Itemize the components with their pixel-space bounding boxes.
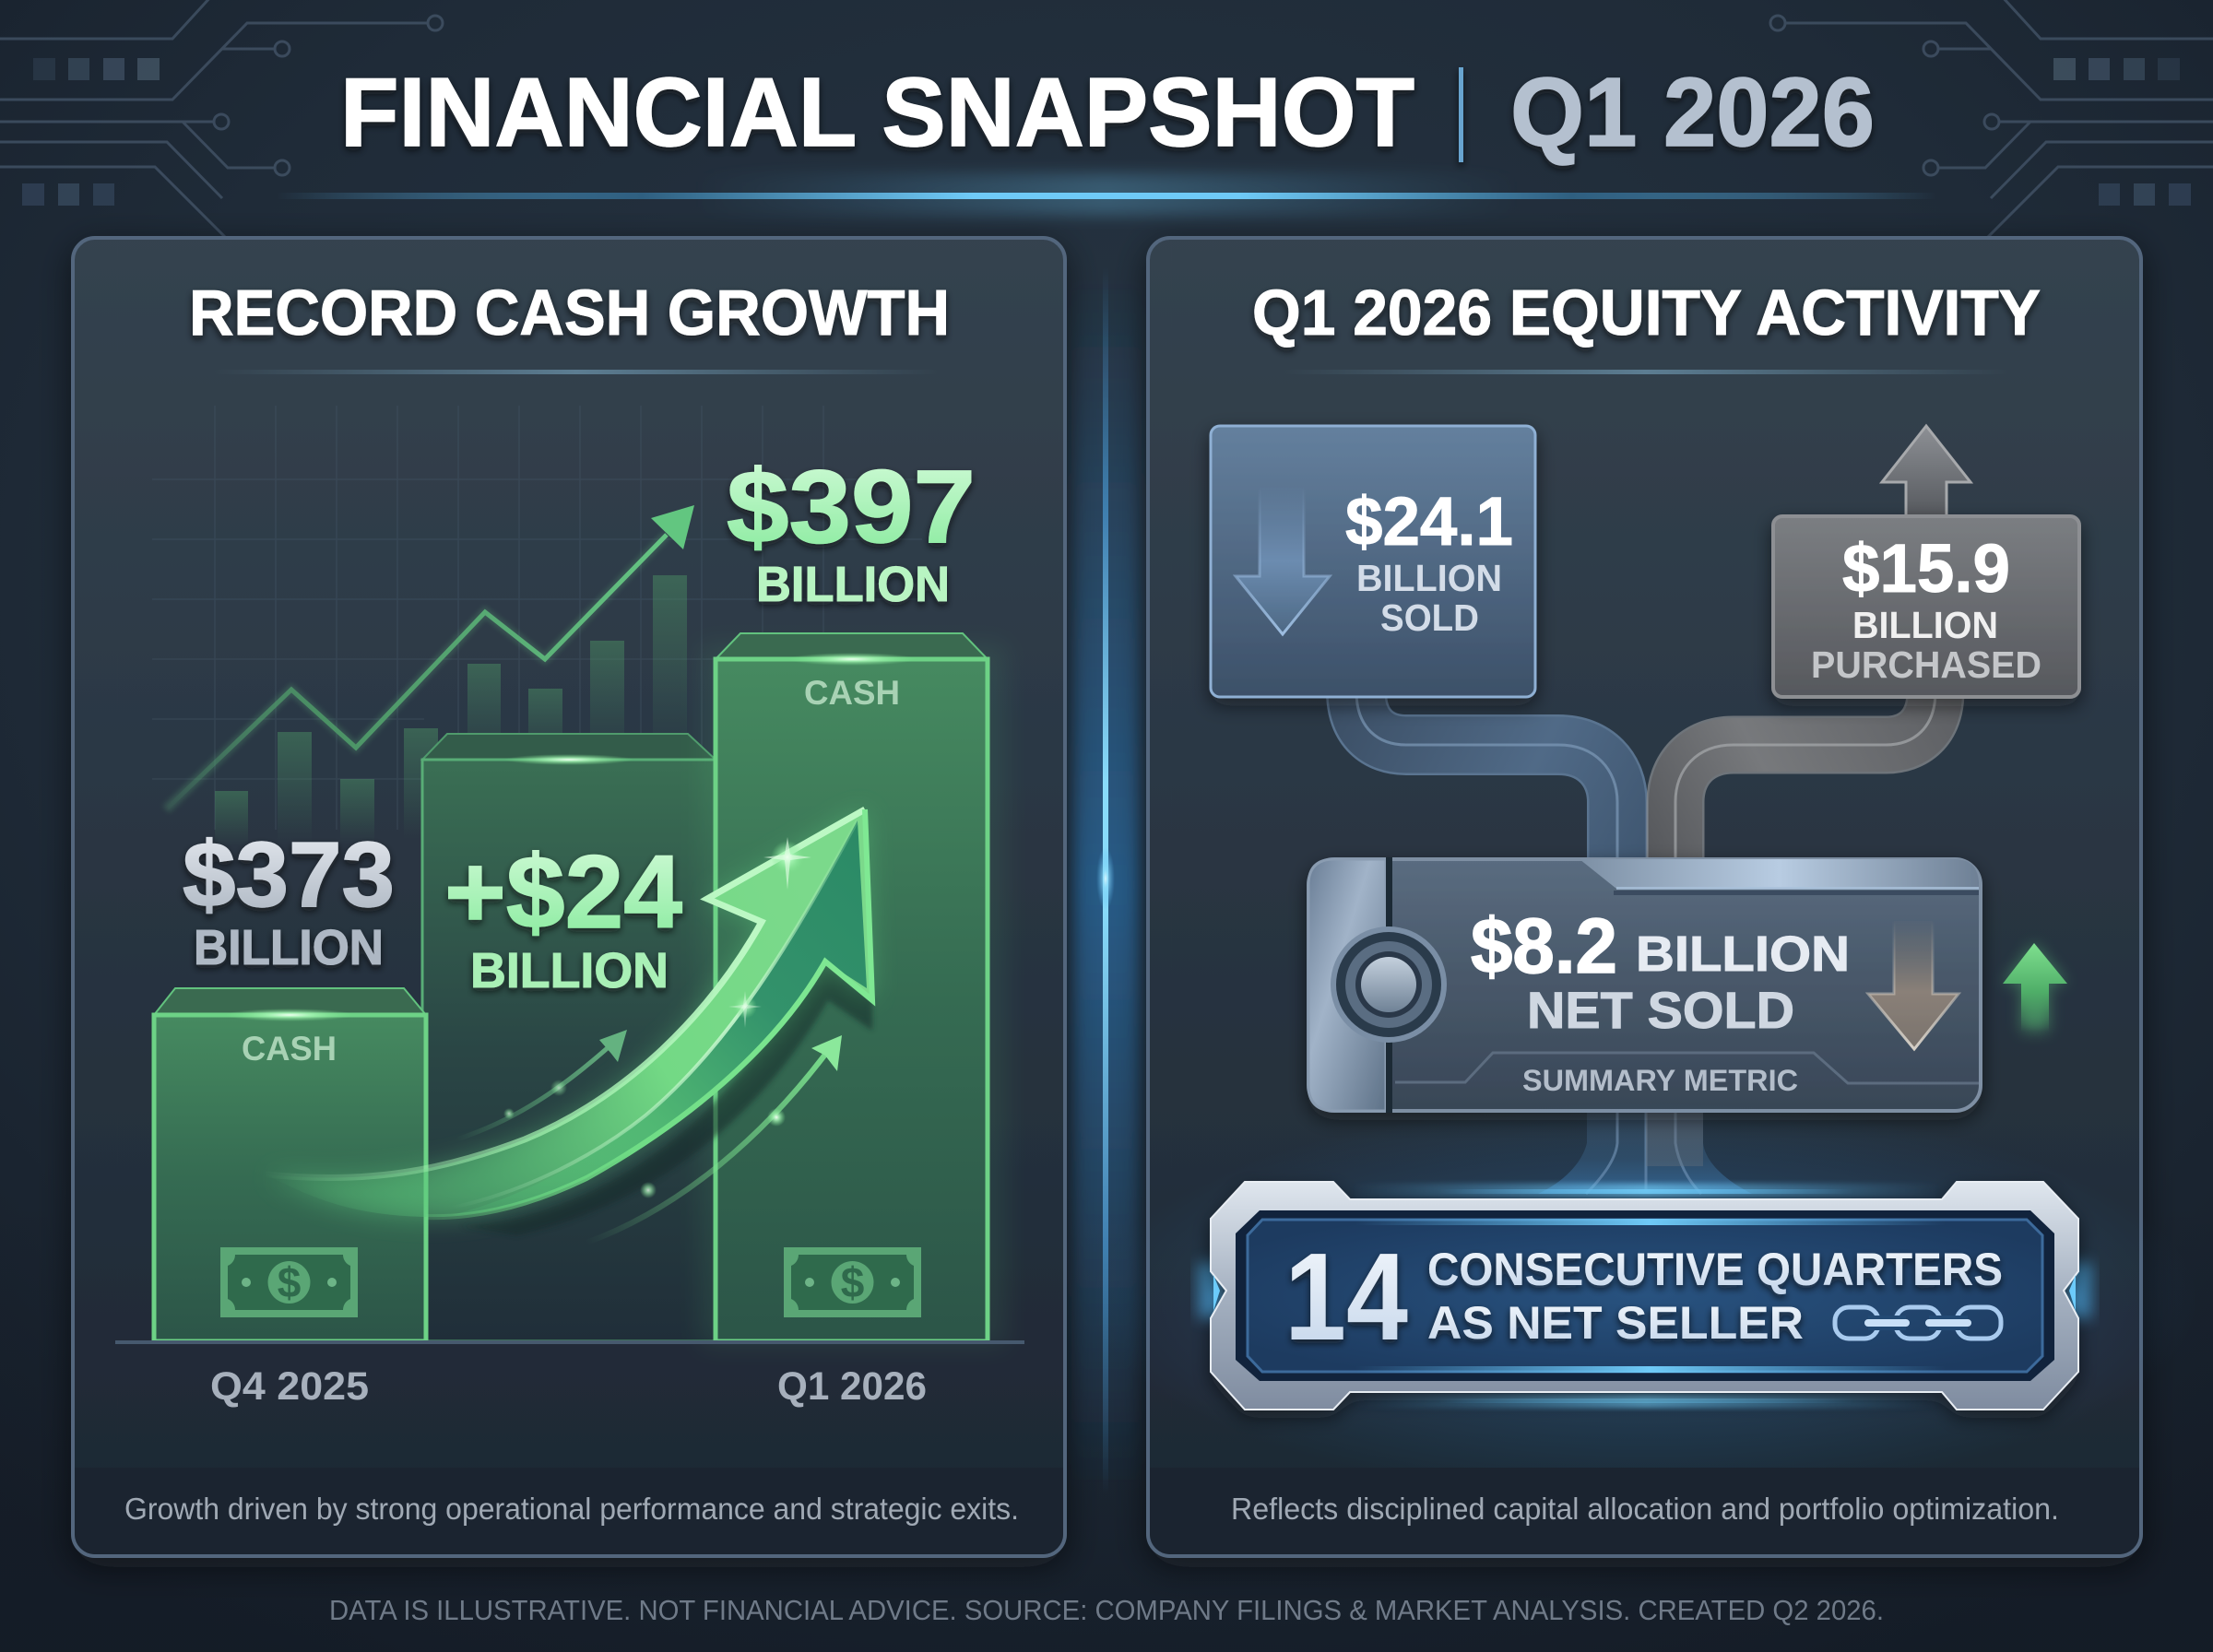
faded background bars: [215, 575, 687, 846]
icon: banknote: [220, 1247, 358, 1317]
net sold label: NET SOLD: [1527, 981, 1794, 1039]
panel footer: [75, 1468, 1063, 1554]
heading underline: [1282, 370, 2010, 374]
bar: middle delta: [422, 734, 716, 1341]
side glow lights: [1199, 1263, 2091, 1318]
panel heading: Q1 2026 EQUITY ACTIVITY: [1252, 277, 2041, 348]
value: +$24 billion: BILLION: [470, 943, 669, 998]
summary label: SUMMARY METRIC: [1522, 1064, 1798, 1097]
title: FINANCIAL SNAPSHOT: [340, 58, 1414, 167]
bar: Q4 2025: [154, 988, 426, 1341]
amount: $15.9: [1842, 530, 2010, 607]
icon: green up arrow: [2003, 943, 2067, 1032]
amount caption: [1811, 604, 2041, 686]
badge line two: AS NET SELLER: [1427, 1297, 1804, 1349]
blue flow pipe: [1356, 691, 1617, 867]
arrow light face: [266, 809, 872, 1217]
heading underline: [212, 370, 941, 374]
arrow outline lower: [426, 809, 872, 1217]
trend line arrow: [166, 505, 694, 809]
badge line one: CONSECUTIVE QUARTERS: [1427, 1244, 2003, 1295]
dial knob: [1331, 926, 1447, 1043]
value: +$24 billion: [444, 834, 682, 998]
top highlight strip: [1580, 859, 1979, 889]
grey flow pipe: [1675, 691, 1935, 867]
dark inner well: [1236, 1210, 2054, 1381]
card: billion purchased: [1773, 516, 2079, 697]
sparkle: shaft: [728, 991, 762, 1028]
streak badge: [1092, 1102, 2198, 1498]
big number: 14: [1284, 1227, 1408, 1366]
icon: banknote: [784, 1247, 921, 1317]
panel frame: [73, 238, 1065, 1556]
bar label: CASH: [242, 1030, 337, 1068]
amount caption: SOLD: [1380, 596, 1479, 639]
billion label: BILLION: [1636, 926, 1850, 982]
icon: down arrow: [1236, 488, 1330, 634]
icon: banknote: $: [278, 1258, 301, 1306]
arrow shadow: [461, 962, 872, 1235]
amount caption: BILLION: [1852, 604, 1998, 646]
arrow glow: [266, 809, 872, 1217]
panel heading: RECORD CASH GROWTH: [189, 277, 950, 348]
blue inner plate: [1248, 1220, 2042, 1372]
axis label: Q4 2025: Q4 2025: [210, 1364, 369, 1409]
title: Q1 2026: [1510, 58, 1875, 167]
axis label: Q1 2026: Q1 2026: [777, 1364, 927, 1409]
plate bottom glow: [1355, 1366, 1946, 1373]
baseline: [115, 1340, 1024, 1344]
bar label: CASH: [804, 674, 900, 712]
badge halo: [1092, 1102, 2198, 1498]
panel footer: Reflects disciplined capital allocation and portfolio optimization.: [1231, 1492, 2059, 1526]
value: $397 billion: BILLION: [756, 557, 950, 612]
value: $397 billion: $397: [727, 449, 976, 564]
panel: record cash growth: [73, 238, 1065, 1556]
amount caption: PURCHASED: [1811, 643, 2041, 686]
arrow outline upper: [266, 809, 865, 1178]
side light strips: [1213, 1275, 2076, 1311]
circuit decoration: left: [0, 0, 443, 237]
badge lower glow: [1351, 1394, 1941, 1408]
icon: chain: [1835, 1307, 2001, 1339]
bar: Q1 2026: [701, 633, 1005, 1346]
value: $373 billion: $373: [183, 823, 395, 926]
summary label tab: [1395, 1053, 1979, 1083]
small rising arrow: [456, 1030, 627, 1139]
panel footer: [1150, 1468, 2139, 1554]
arrow teal face: [452, 820, 867, 1215]
sweeping growth arrow: [266, 809, 872, 1235]
summary metric card: [1308, 857, 1981, 1113]
value: +$24 billion: +$24: [444, 834, 682, 950]
icon: banknote: $: [841, 1258, 864, 1306]
amount caption: BILLION: [1356, 557, 1502, 599]
panel frame: [1148, 238, 2141, 1556]
icon: down arrow: [1868, 921, 1959, 1049]
value: $397 billion: [727, 449, 976, 612]
center vertical glow divider: [1071, 267, 1142, 1493]
value: $373 billion: [183, 823, 395, 975]
value: $373 billion: BILLION: [194, 920, 384, 975]
circuit decoration: right: [1770, 0, 2213, 237]
silver frame: [1211, 1182, 2078, 1410]
left end cap: [1308, 859, 1386, 1111]
badge upper glow: [1351, 1184, 1941, 1198]
icon: up arrow: [1882, 426, 1970, 518]
amount caption: [1356, 557, 1502, 639]
panel: equity activity: [1092, 238, 2198, 1556]
background grid: [152, 406, 922, 830]
plate top glow: [1355, 1219, 1946, 1225]
card: billion sold: [1211, 426, 1535, 697]
header glow rule: [277, 173, 1936, 216]
amount: $24.1: [1345, 483, 1513, 560]
disclaimer: DATA IS ILLUSTRATIVE. NOT FINANCIAL ADVICE. SOURCE: COMPANY FILINGS & MARKET ANALYSIS. CREATED Q2 2026.: [329, 1594, 1884, 1626]
arrow centre highlight: [443, 820, 858, 1210]
net sold amount: $8.2: [1471, 903, 1617, 989]
lower rising arrow: [586, 1035, 842, 1243]
panel footer: Growth driven by strong operational performance and strategic exits.: [124, 1492, 1019, 1526]
sparkle: head: [763, 837, 811, 890]
converging pipes below summary: [1538, 1106, 1752, 1194]
